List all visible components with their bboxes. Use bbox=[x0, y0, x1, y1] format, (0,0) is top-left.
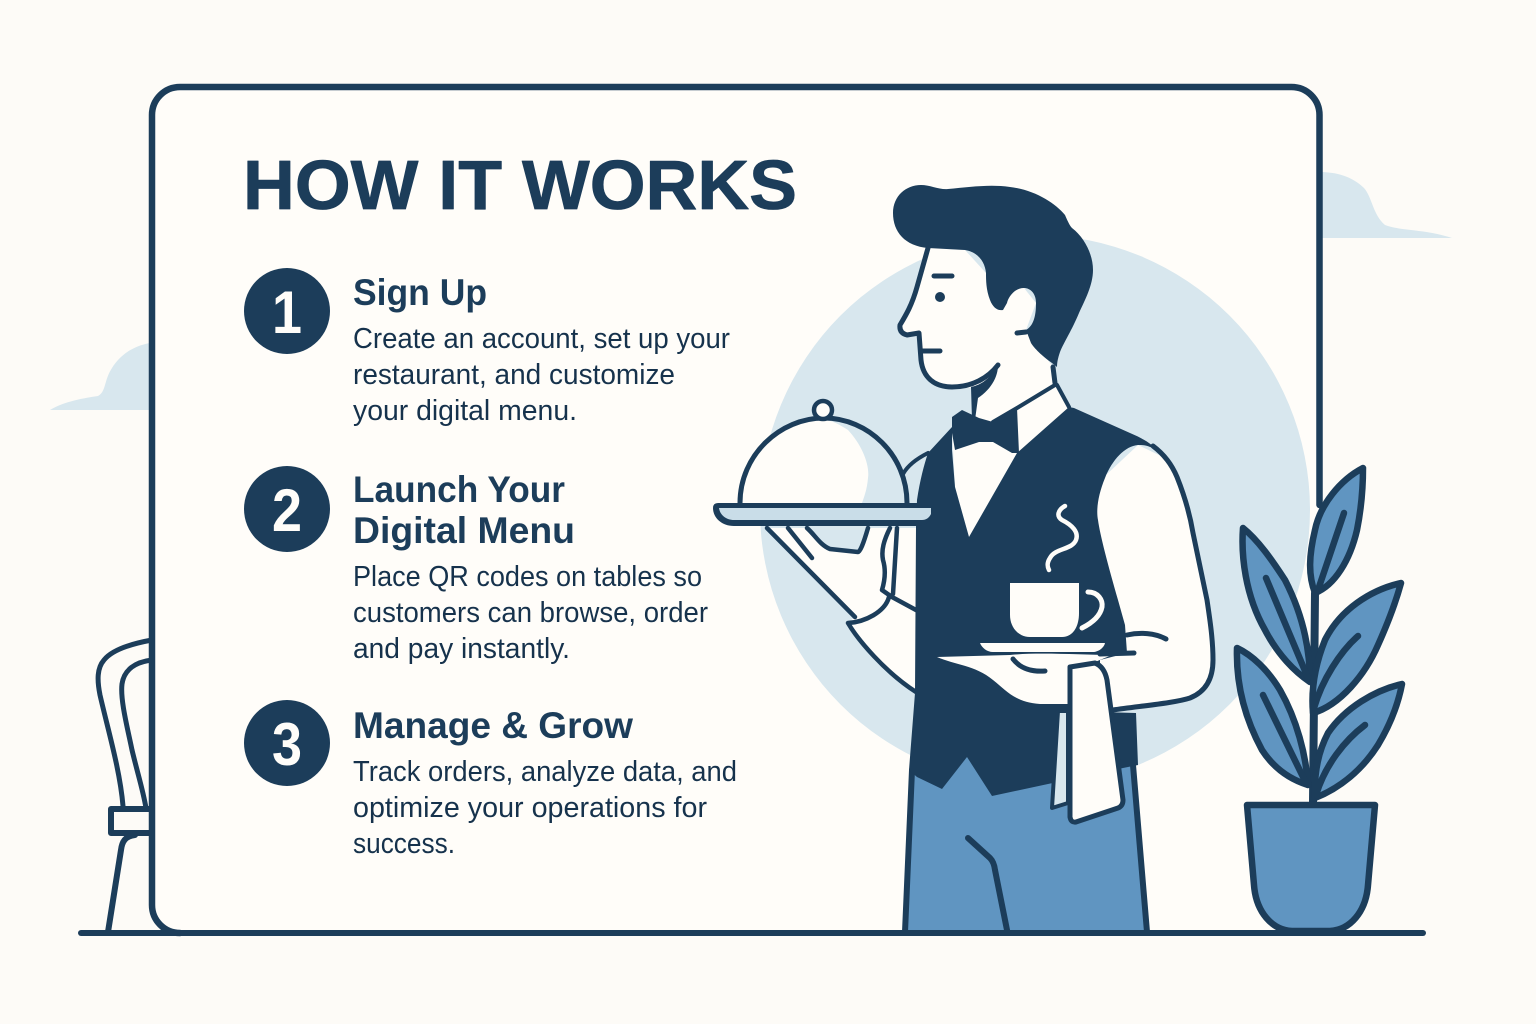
step 1 description: Create an account, set up your bbox=[353, 323, 730, 355]
collar bbox=[993, 385, 1069, 422]
hair bbox=[893, 185, 1093, 367]
step 3 badge: 3 bbox=[272, 711, 302, 778]
sleeve crease bbox=[1100, 633, 1166, 654]
steam bbox=[1048, 506, 1077, 570]
trouser outline bbox=[905, 765, 1147, 932]
step 3 bbox=[244, 700, 737, 860]
finger bbox=[1013, 659, 1045, 671]
background circle bbox=[760, 235, 1310, 785]
waiter illustration bbox=[713, 185, 1213, 932]
step 3 heading: Manage & Grow bbox=[353, 705, 633, 746]
eye bbox=[935, 292, 945, 302]
rear arm bbox=[1090, 445, 1213, 710]
chair behind the card bbox=[98, 640, 153, 932]
jaw shadow bbox=[971, 365, 998, 420]
step 2 heading: Launch Your bbox=[353, 469, 565, 510]
vest bbox=[909, 407, 1155, 796]
step 3 description: optimize your operations for bbox=[353, 792, 707, 824]
coffee cup bbox=[1010, 583, 1079, 637]
step 2 badge: 2 bbox=[272, 477, 302, 544]
leaf: top bbox=[1310, 468, 1363, 593]
trouser crease bbox=[968, 838, 1007, 930]
step 1 description: restaurant, and customize bbox=[353, 359, 675, 391]
cloud: right bbox=[1320, 172, 1452, 238]
stem bbox=[1313, 593, 1315, 803]
face profile bbox=[900, 248, 1055, 387]
step 1 description: your digital menu. bbox=[353, 395, 577, 427]
step 2 heading bbox=[353, 469, 575, 551]
step 1 bbox=[244, 268, 730, 427]
step 2 description: customers can browse, order bbox=[353, 597, 708, 629]
step 2 description bbox=[353, 561, 708, 665]
towel bbox=[1070, 663, 1123, 822]
step 1 heading: Sign Up bbox=[353, 272, 487, 313]
leaf: lower left bbox=[1237, 648, 1308, 785]
strip behind towel bbox=[1052, 711, 1068, 808]
mouth bbox=[921, 348, 940, 354]
step 3 badge bbox=[244, 700, 330, 786]
leaf: upper right bbox=[1312, 583, 1401, 713]
plant bbox=[1237, 468, 1402, 931]
step 2 heading: Digital Menu bbox=[353, 510, 575, 551]
serving arm bbox=[767, 528, 916, 692]
flower pot bbox=[1247, 805, 1375, 931]
step 2 description: and pay instantly. bbox=[353, 633, 570, 665]
trousers bbox=[905, 740, 1147, 932]
step 1 badge bbox=[244, 268, 330, 354]
step 3 description: success. bbox=[353, 828, 455, 860]
coffee hand bbox=[937, 654, 1112, 704]
title: HOW IT WORKS bbox=[243, 146, 797, 224]
step 3 description bbox=[353, 756, 737, 860]
step 2 badge bbox=[244, 466, 330, 552]
bow tie bbox=[952, 408, 1019, 453]
rear arm outline bbox=[1113, 446, 1213, 710]
eyebrow bbox=[934, 274, 952, 278]
step 1 badge: 1 bbox=[272, 279, 302, 346]
shirt front bbox=[952, 385, 1071, 537]
cup handle bbox=[1082, 592, 1102, 628]
leaf: upper left bbox=[1243, 528, 1310, 682]
leaf: lower right bbox=[1315, 684, 1402, 798]
step 2 description: Place QR codes on tables so bbox=[353, 561, 702, 593]
step 3 description: Track orders, analyze data, and bbox=[353, 756, 737, 788]
step 1 description bbox=[353, 323, 730, 427]
step 2 bbox=[244, 466, 708, 665]
floor line bbox=[81, 930, 1423, 936]
cloche bbox=[740, 401, 928, 503]
tray bbox=[713, 503, 932, 526]
cloud: left bbox=[50, 343, 150, 410]
panel: main card bbox=[152, 87, 1320, 933]
saucer bbox=[980, 643, 1105, 652]
head and neck bbox=[900, 248, 1057, 424]
